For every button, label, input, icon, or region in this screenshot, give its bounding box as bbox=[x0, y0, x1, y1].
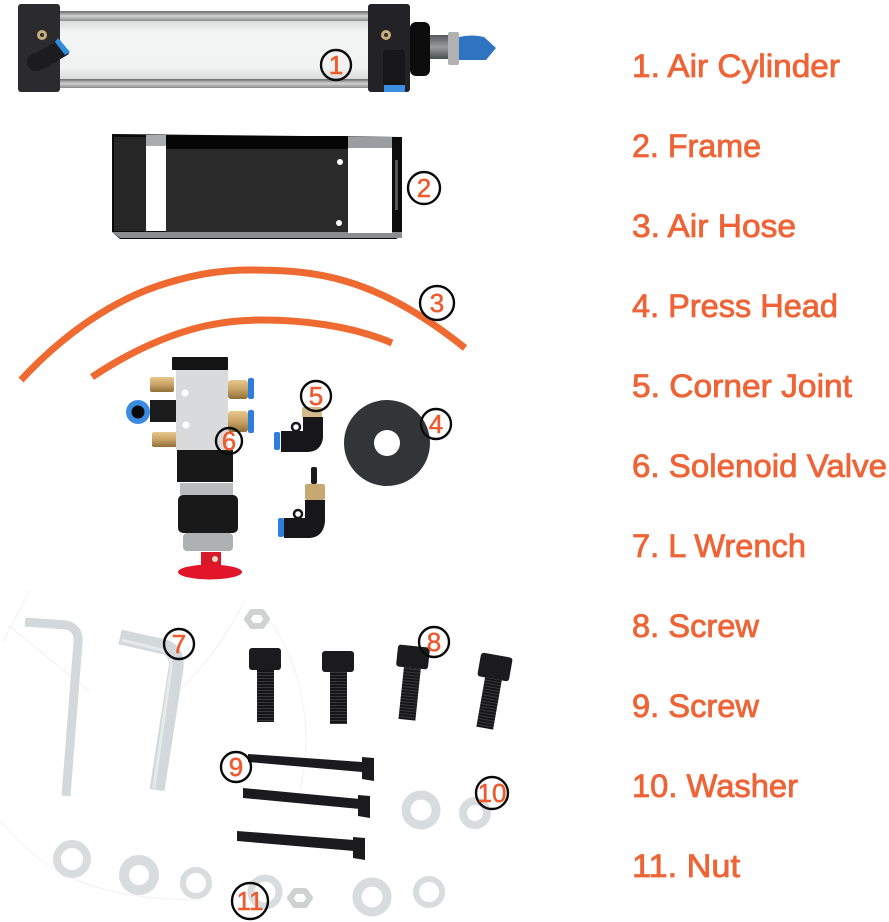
callout 11 bbox=[232, 883, 268, 919]
legend item 7: 7. L Wrench bbox=[632, 528, 806, 564]
callout 11: 11 bbox=[236, 886, 264, 916]
nuts bbox=[247, 612, 310, 905]
air hoses bbox=[21, 270, 465, 380]
legend item 6: 6. Solenoid Valve bbox=[632, 448, 887, 484]
callout 6 bbox=[216, 426, 242, 456]
number callouts bbox=[164, 50, 508, 919]
legend item 11: 11. Nut bbox=[632, 848, 740, 884]
legend item 8: 8. Screw bbox=[632, 608, 760, 644]
legend item 4: 4. Press Head bbox=[632, 288, 838, 324]
callout 5 bbox=[301, 381, 331, 411]
frame bbox=[112, 134, 402, 239]
callout 7 bbox=[164, 629, 194, 659]
panel: part photos bbox=[0, 4, 513, 912]
L wrenches bbox=[25, 622, 176, 796]
press head bbox=[344, 400, 430, 486]
callout 8: 8 bbox=[427, 627, 441, 657]
legend item 2: 2. Frame bbox=[632, 128, 761, 164]
callout 3: 3 bbox=[430, 288, 444, 318]
long screws bbox=[237, 754, 374, 860]
legend item 3: 3. Air Hose bbox=[632, 208, 796, 244]
callout 2 bbox=[408, 172, 440, 204]
legend item 10: 10. Washer bbox=[632, 768, 798, 804]
callout 1 bbox=[321, 50, 351, 80]
air cylinder bbox=[18, 4, 496, 92]
callout 6: 6 bbox=[222, 426, 236, 456]
washers bbox=[57, 795, 487, 912]
callout 7: 7 bbox=[172, 629, 186, 659]
parts legend bbox=[632, 48, 887, 884]
short screws bbox=[249, 644, 513, 731]
callout 2: 2 bbox=[417, 173, 431, 203]
callout 8 bbox=[419, 627, 449, 657]
legend item 1: 1. Air Cylinder bbox=[632, 48, 840, 84]
legend item 9: 9. Screw bbox=[632, 688, 760, 724]
callout 9: 9 bbox=[229, 752, 243, 782]
callout 5: 5 bbox=[309, 381, 323, 411]
solenoid valve bbox=[126, 357, 254, 580]
callout 1: 1 bbox=[329, 50, 343, 80]
callout 9 bbox=[221, 752, 251, 782]
corner joint, upper bbox=[274, 407, 323, 452]
faint background arcs bbox=[0, 590, 306, 900]
corner joint, lower bbox=[278, 467, 325, 538]
callout 3 bbox=[420, 286, 454, 320]
legend item 5: 5. Corner Joint bbox=[632, 368, 852, 404]
callout 10: 10 bbox=[478, 778, 506, 808]
callout 4 bbox=[421, 409, 451, 439]
callout 4: 4 bbox=[429, 409, 443, 439]
